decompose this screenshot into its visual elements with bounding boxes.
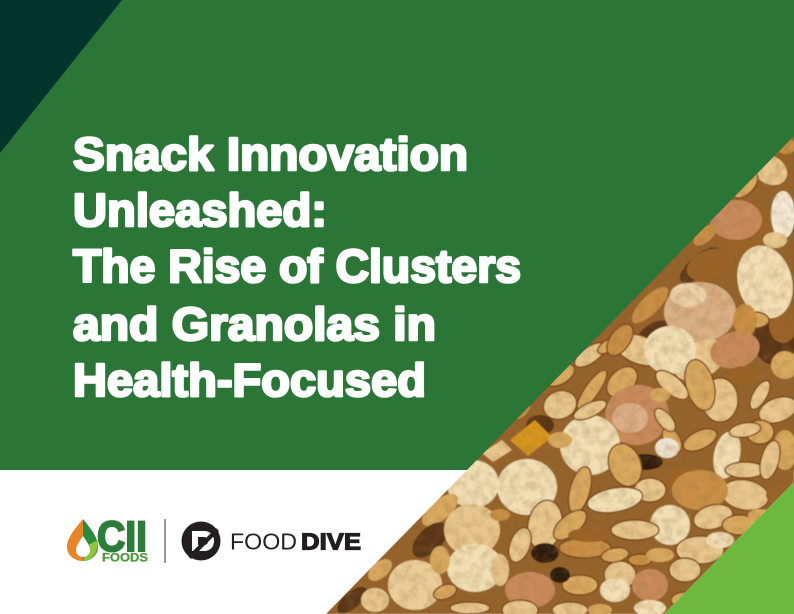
logo: Food Dive: [182, 522, 361, 560]
FOODS wordmark: FOODS: [102, 552, 148, 564]
logo: Food Dive: DIVE: [301, 528, 361, 554]
title: [73, 128, 521, 406]
icon: Food Dive mark: [182, 522, 220, 560]
dark green corner triangle: [0, 0, 122, 153]
logo divider: [164, 519, 166, 563]
title: The Rise of Clusters: [73, 240, 521, 292]
light green corner triangle: [664, 482, 794, 614]
CII wordmark: CII: [97, 513, 147, 561]
title: Snack Innovation: [73, 128, 468, 180]
green background panel: [0, 0, 794, 470]
logo: CII Foods: [67, 513, 148, 564]
Food Dive wordmark: FOOD: [230, 528, 297, 554]
granola photo band: [320, 130, 794, 614]
title: Unleashed:: [73, 184, 327, 236]
white logo strip: [0, 470, 794, 614]
title: Health-Focused: [73, 354, 426, 406]
icon: droplet leaf: [67, 519, 98, 561]
title: and Granolas in: [73, 298, 436, 350]
photo grain texture: [320, 130, 794, 614]
